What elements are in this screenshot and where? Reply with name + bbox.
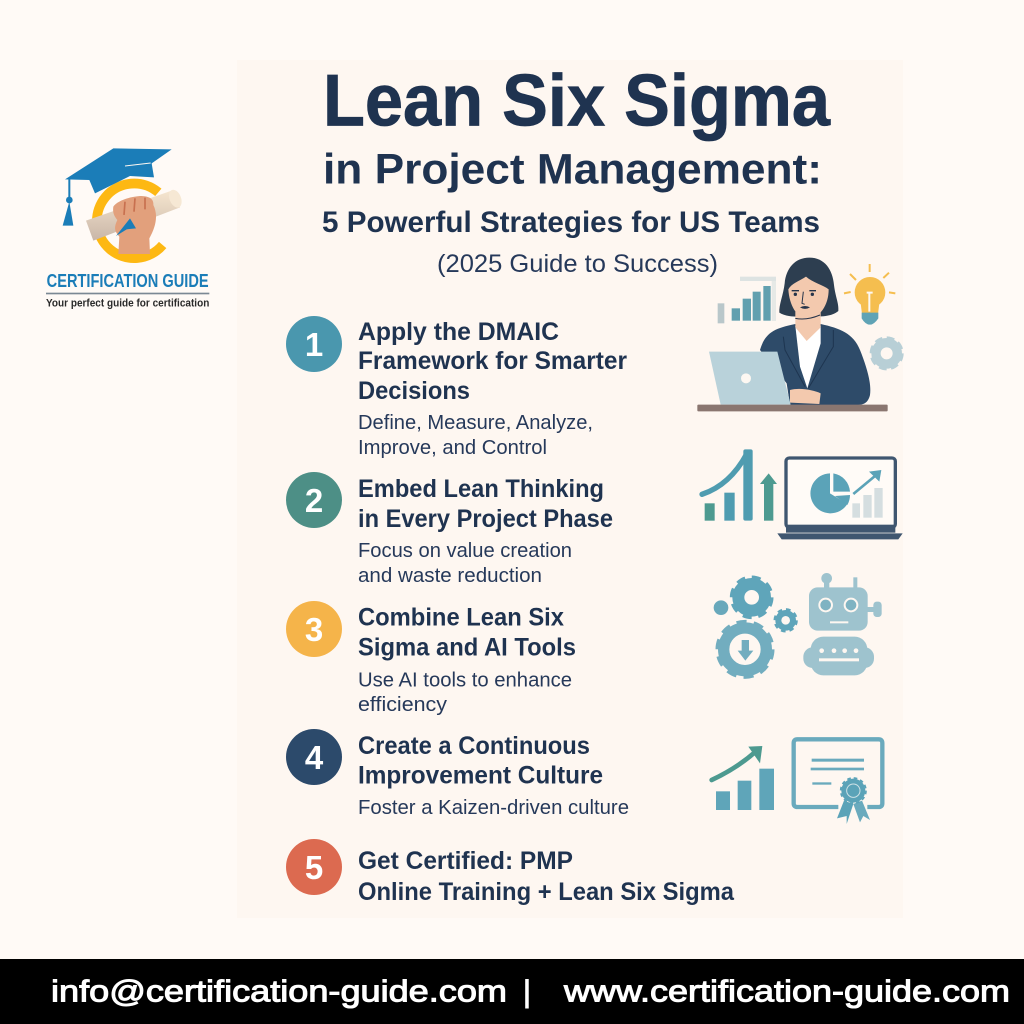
icon: certificate with ribbon <box>794 739 882 824</box>
step 4 description: Foster a Kaizen-driven culture <box>358 796 629 819</box>
step 5 heading <box>358 847 735 906</box>
logo graduation cap <box>63 148 172 226</box>
badge 3: 3 <box>305 611 323 648</box>
logo scroll <box>86 188 184 241</box>
badge 1 <box>286 316 342 372</box>
step 2 description: Focus on value creation <box>358 539 572 562</box>
badge 1: 1 <box>305 326 323 363</box>
step 1 <box>286 316 627 459</box>
step 2 heading: in Every Project Phase <box>358 505 613 533</box>
footer contact text: info@certification-guide.com <box>51 974 507 1008</box>
icon: robot <box>803 573 882 675</box>
step 4 <box>286 729 629 819</box>
illustration: woman at laptop with chart, bulb, gear <box>697 258 902 411</box>
step 1 heading: Apply the DMAIC <box>358 318 559 346</box>
step 5 heading: Get Certified: PMP <box>358 847 573 875</box>
step 1 heading: Decisions <box>358 377 470 405</box>
footer contact text: www.certification-guide.com <box>563 974 1010 1008</box>
laptop <box>709 352 791 405</box>
badge 2 <box>286 472 342 528</box>
icon: gears <box>714 577 797 677</box>
icon: light bulb <box>844 264 895 325</box>
title: Lean Six Sigma <box>323 61 831 142</box>
step 5 heading: Online Training + Lean Six Sigma <box>358 878 735 906</box>
faded bar chart <box>718 277 776 323</box>
woman <box>760 258 870 405</box>
panel: main content background <box>237 60 903 918</box>
badge 2: 2 <box>305 482 323 519</box>
illustration: growth chart and laptop analytics <box>702 449 903 539</box>
badge 5 <box>286 839 342 895</box>
laptop with pie chart <box>777 458 903 539</box>
badge 4 <box>286 729 342 785</box>
step 1 description: Improve, and Control <box>358 436 547 459</box>
illustration: growth and certificate <box>712 739 882 824</box>
step 2 heading: Embed Lean Thinking <box>358 475 604 503</box>
step 2 description <box>358 539 572 587</box>
step 2 description: and waste reduction <box>358 564 542 587</box>
step 1 heading <box>358 318 627 405</box>
step 2 heading <box>358 475 613 533</box>
step 1 heading: Framework for Smarter <box>358 347 627 375</box>
step 3 description: Use AI tools to enhance <box>358 668 572 692</box>
step 3 heading <box>358 604 576 662</box>
step 3 heading: Sigma and AI Tools <box>358 634 576 662</box>
subtitle strategies: 5 Powerful Strategies for US Teams <box>322 206 820 239</box>
badge 5: 5 <box>305 849 323 886</box>
step 3 heading: Combine Lean Six <box>358 604 564 632</box>
rising bars with curve and arrow <box>702 449 777 521</box>
footer contact text: | <box>523 974 531 1008</box>
subtitle line: in Project Management: <box>323 146 822 194</box>
illustration: gears and robot <box>714 573 882 677</box>
icon: growth bars with arrow <box>712 746 774 810</box>
logo letter C <box>97 183 163 258</box>
step 1 description: Define, Measure, Analyze, <box>358 411 593 434</box>
logo: Certification Guide <box>46 148 210 310</box>
logo ribbon <box>116 218 136 236</box>
badge 4: 4 <box>305 739 324 776</box>
step 4 heading <box>358 732 603 790</box>
desk <box>697 405 888 411</box>
step 4 heading: Create a Continuous <box>358 732 590 760</box>
step 1 description <box>358 411 593 459</box>
step 2 <box>286 472 613 587</box>
badge 3 <box>286 601 342 657</box>
icon: gear <box>871 338 902 369</box>
step 3 description <box>358 668 572 716</box>
logo name: CERTIFICATION GUIDE <box>47 270 209 291</box>
logo tagline: Your perfect guide for certification <box>46 298 210 310</box>
footer bar <box>0 959 1024 1024</box>
step 5 <box>286 839 735 906</box>
logo rule <box>46 293 209 294</box>
footer contact text <box>51 974 1010 1008</box>
subtitle year: (2025 Guide to Success) <box>437 250 718 278</box>
logo fist <box>113 196 156 254</box>
step 3 description: efficiency <box>358 693 448 716</box>
step 4 heading: Improvement Culture <box>358 762 603 790</box>
step 3 <box>286 601 576 716</box>
